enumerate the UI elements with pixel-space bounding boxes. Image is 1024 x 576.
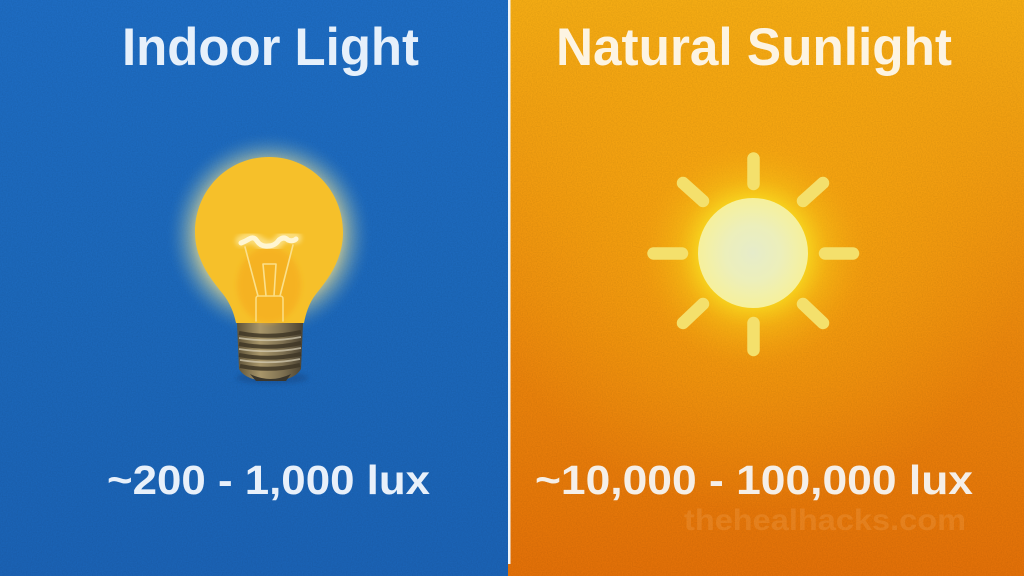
icon: sun <box>638 138 868 368</box>
bulb base <box>237 323 303 381</box>
heading: Natural Sunlight: Natural Sunlight <box>556 18 952 77</box>
center divider <box>508 0 510 564</box>
panel: natural sunlight background <box>508 0 1024 576</box>
icon: light bulb <box>165 131 373 384</box>
sun rays <box>654 158 853 350</box>
watermark: thehealhacks.com <box>684 504 966 537</box>
sun disc <box>698 198 808 308</box>
heading: Indoor Light: Indoor Light <box>122 18 419 77</box>
panel: indoor light background <box>0 0 508 576</box>
bulb glass <box>195 157 343 323</box>
label: sunlight lux range: ~10,000 - 100,000 lux <box>535 457 973 503</box>
filament <box>241 236 296 321</box>
label: indoor lux range: ~200 - 1,000 lux <box>107 457 430 503</box>
